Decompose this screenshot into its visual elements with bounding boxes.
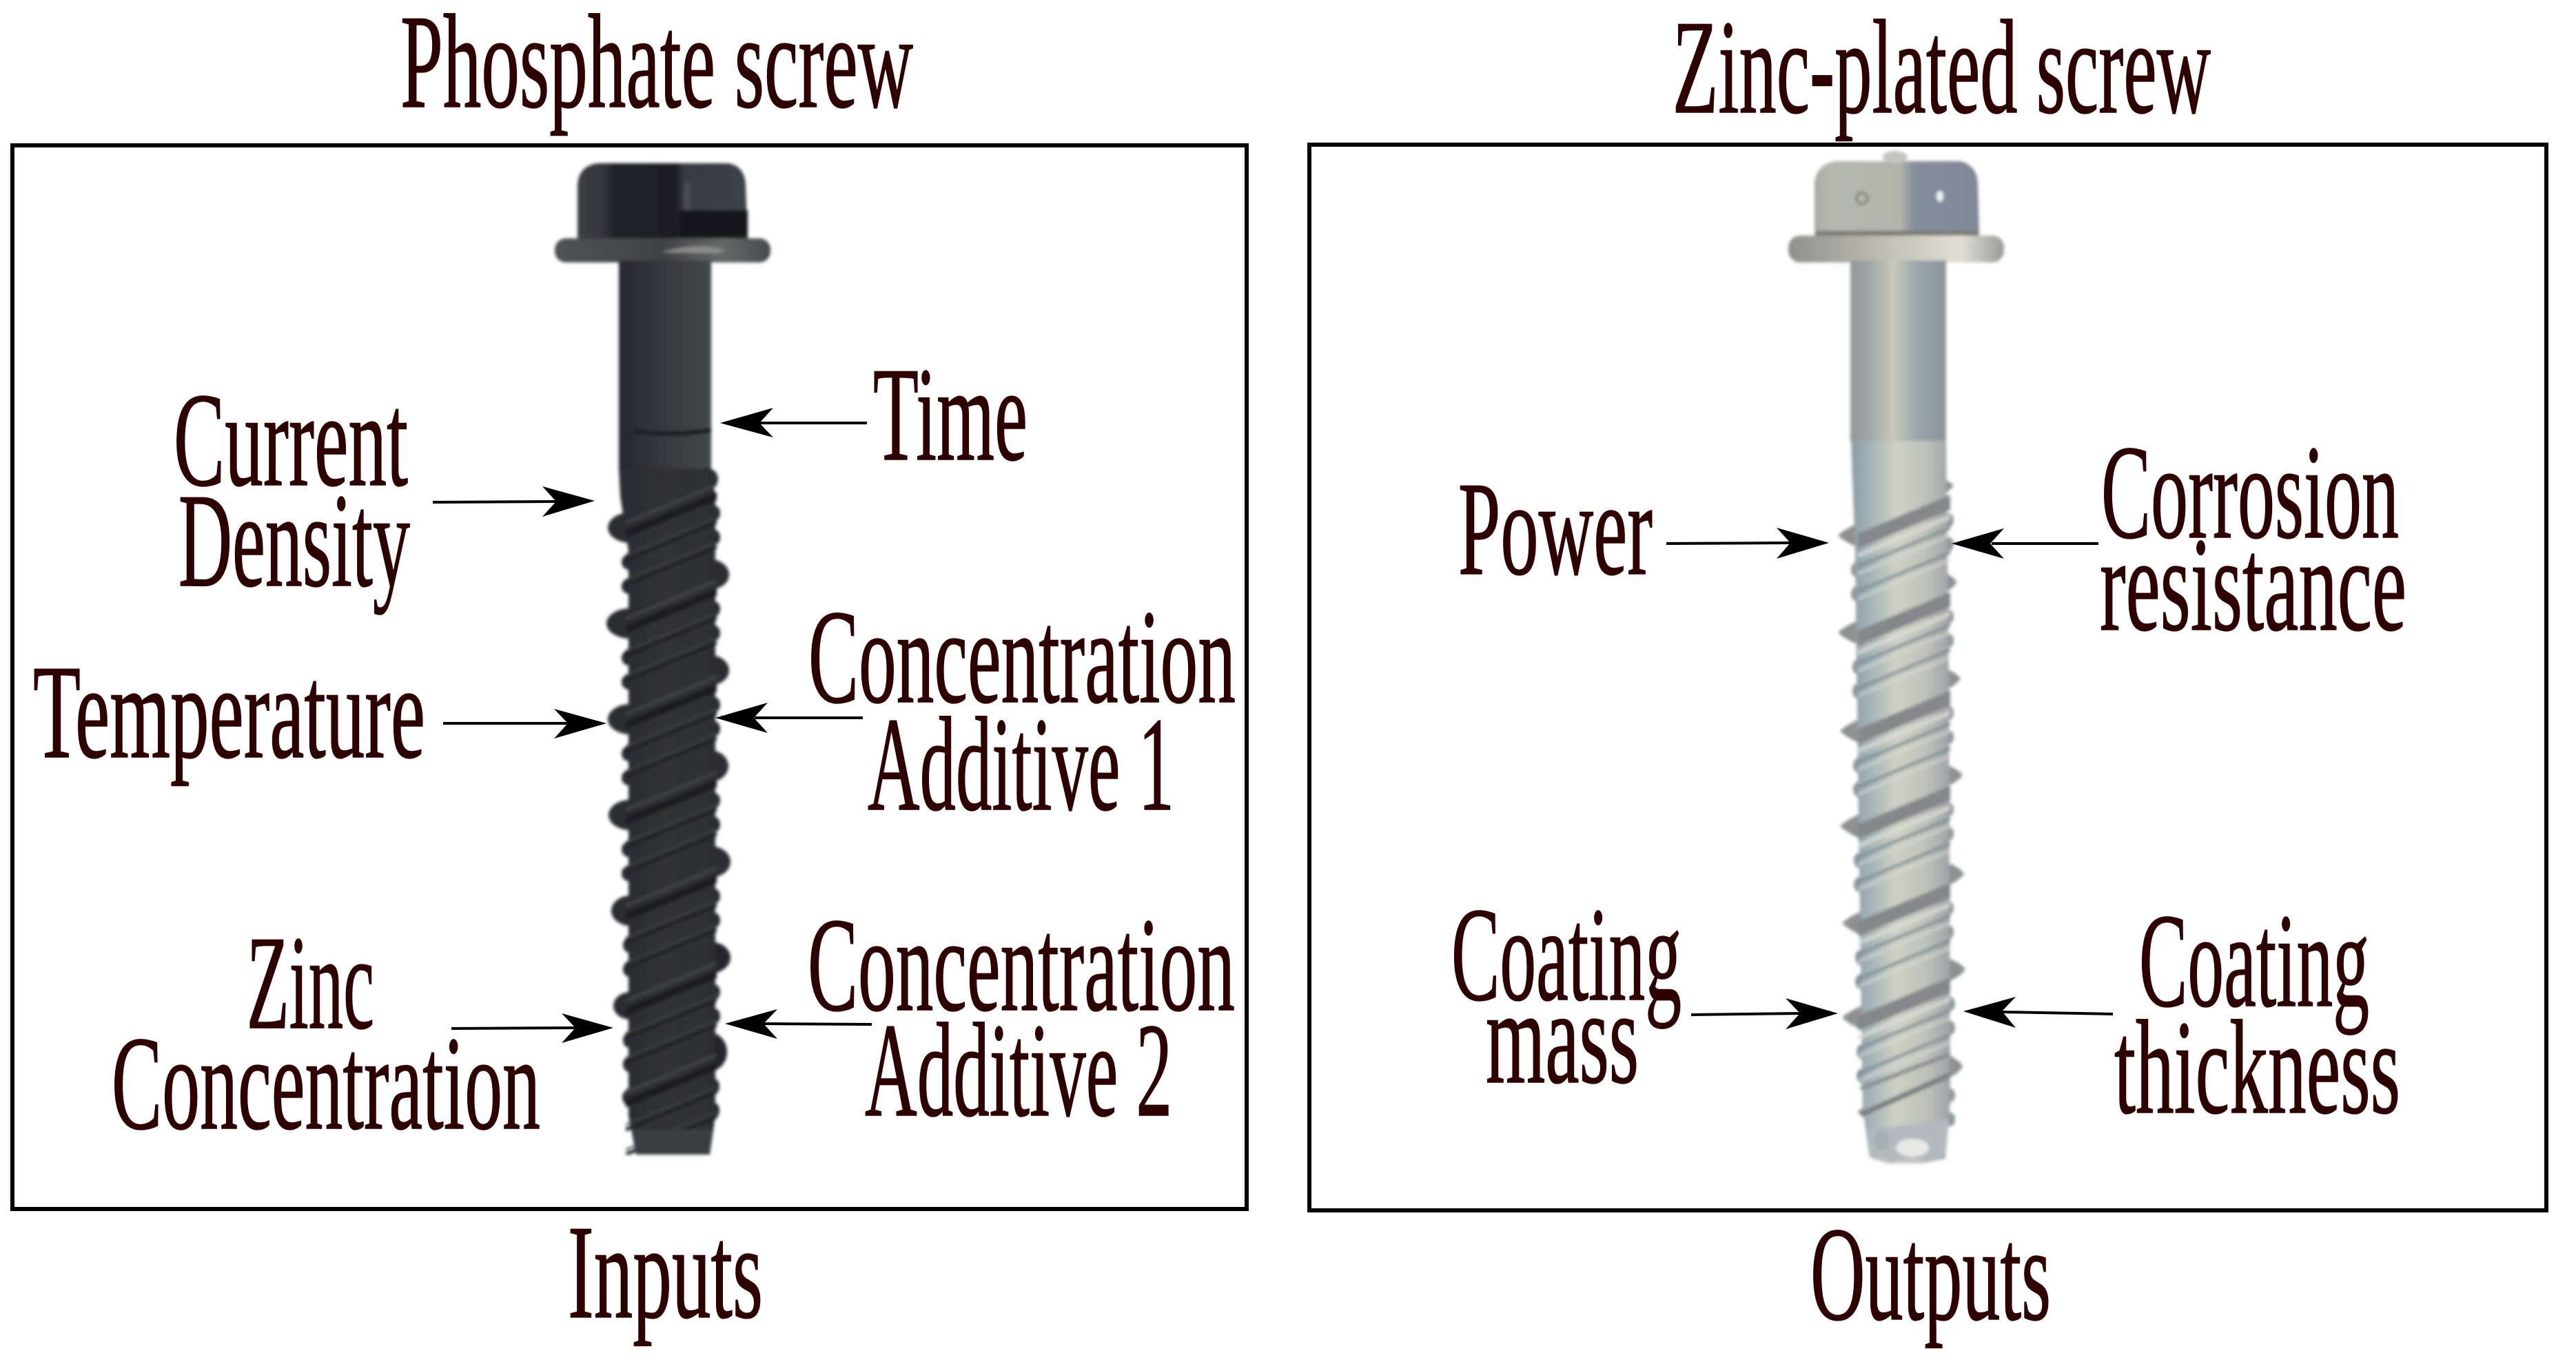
label: Coating mass: Coating — [1451, 880, 1681, 1029]
arrow: concentration additive 1 — [715, 703, 863, 733]
label: Current Density: Current — [174, 366, 408, 515]
label: Concentration Additive 1: Additive 1 — [868, 690, 1174, 839]
label: Concentration Additive 2 — [808, 891, 1235, 1145]
arrow: corrosion resistance — [1952, 528, 2098, 559]
panel: outputs frame — [1309, 145, 2546, 1210]
screw head — [577, 163, 748, 239]
caption: Inputs: Inputs — [568, 1198, 763, 1347]
label: Concentration Additive 1 — [808, 583, 1236, 839]
thread bumps — [622, 506, 720, 1118]
label: Coating mass: mass — [1486, 963, 1639, 1112]
label: Concentration Additive 2: Additive 2 — [865, 996, 1172, 1145]
arrow: coating mass — [1691, 998, 1838, 1029]
score line — [634, 430, 711, 434]
threaded core — [1851, 441, 1950, 1164]
screw tip — [1869, 1119, 1949, 1164]
arrow: time — [720, 408, 867, 437]
arrow: current density — [433, 486, 595, 517]
label: Coating thickness: Coating — [2139, 887, 2369, 1035]
label: Zinc Concentration: Concentration — [112, 1009, 540, 1158]
label: Zinc Concentration: Zinc — [247, 909, 374, 1057]
label: Temperature: Temperature — [33, 638, 425, 787]
threaded core — [619, 468, 715, 1155]
label: Coating thickness — [2114, 887, 2400, 1142]
screw flange — [1788, 236, 2004, 262]
screw flange — [555, 238, 770, 262]
caption: Outputs: Outputs — [1810, 1200, 2051, 1349]
arrow: concentration additive 2 — [725, 1009, 872, 1039]
label: Corrosion resistance — [2100, 418, 2406, 659]
label: Zinc Concentration — [112, 909, 540, 1158]
label: Time: Time — [873, 340, 1028, 489]
screw shank — [1850, 260, 1946, 441]
label: Current Density — [174, 366, 410, 615]
panel: inputs frame — [12, 145, 1247, 1209]
arrow: temperature — [443, 709, 606, 738]
screw tip — [633, 1130, 713, 1155]
screw head — [1815, 151, 1979, 236]
thread bumps — [1851, 513, 1955, 1126]
arrow: power — [1666, 528, 1829, 559]
thread lines — [1856, 493, 1953, 1119]
label: Concentration Additive 2: Concentration — [808, 891, 1235, 1040]
screw shank — [619, 260, 711, 471]
thread fins — [1838, 475, 1965, 1122]
label: Power: Power — [1458, 455, 1653, 603]
thread fins — [606, 468, 730, 1108]
label: Current Density: Density — [178, 466, 410, 615]
arrow: coating thickness — [1963, 997, 2113, 1028]
arrow: zinc concentration — [451, 1013, 613, 1043]
label: Coating mass — [1451, 880, 1681, 1112]
zinc-plated screw image — [1788, 151, 2004, 1164]
thread lines — [620, 484, 720, 1157]
phosphate screw image — [555, 163, 770, 1157]
label: Concentration Additive 1: Concentration — [808, 583, 1236, 732]
